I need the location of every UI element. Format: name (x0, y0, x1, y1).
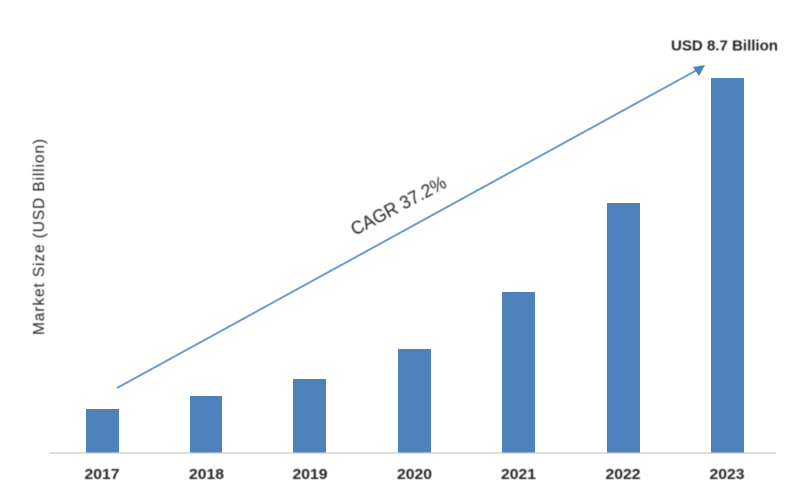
y-axis title: Market Size (USD Billion) (31, 139, 48, 335)
bars (86, 78, 744, 452)
label 2020: 2020 (397, 466, 432, 483)
label 2017: 2017 (84, 466, 120, 483)
x-axis year labels (84, 466, 744, 483)
x-axis line (49, 452, 776, 454)
bar 2022 (607, 203, 640, 452)
label 2018: 2018 (189, 466, 224, 483)
callout: 2023 value: USD 8.7 Billion (671, 38, 778, 54)
label 2022: 2022 (606, 466, 640, 483)
bar 2017 (86, 409, 119, 452)
label 2019: 2019 (292, 466, 328, 483)
label 2021: 2021 (501, 466, 536, 483)
bar 2018 (190, 396, 222, 452)
bar 2019 (293, 379, 326, 452)
bar 2021 (502, 292, 535, 452)
CAGR label: CAGR 37.2% (347, 172, 450, 240)
bar 2020 (398, 349, 431, 452)
bar 2023 (711, 78, 744, 452)
label 2023: 2023 (710, 466, 744, 483)
arrow: growth trend (117, 65, 705, 388)
